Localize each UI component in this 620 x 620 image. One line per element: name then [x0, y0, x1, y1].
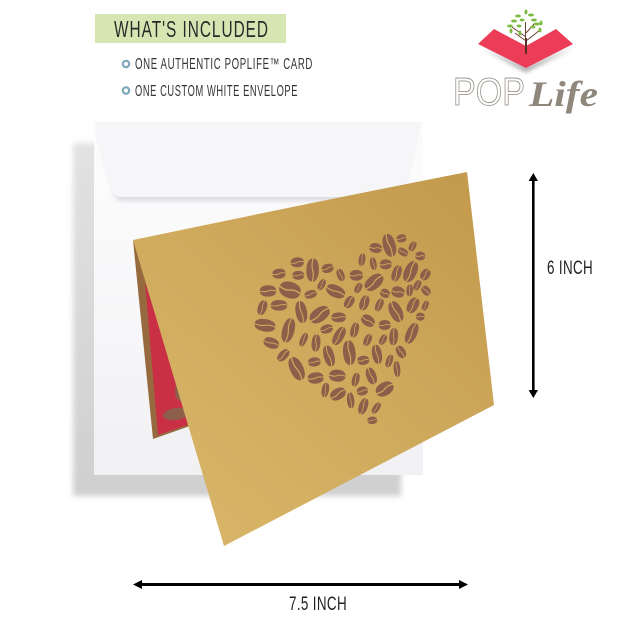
envelope flap [95, 122, 422, 197]
interior bean cutout [162, 381, 190, 422]
logo: poplife [453, 10, 598, 114]
logo wordmark pop: POP [453, 71, 525, 114]
included item: envelope: ONE CUSTOM WHITE ENVELOPE [135, 83, 298, 100]
logo chevron shadow [482, 47, 574, 72]
width label: 7.5 INCH [289, 594, 347, 615]
card red interior [145, 282, 190, 435]
height arrow [529, 173, 538, 398]
envelope flap shadow [112, 190, 412, 201]
included item: card [123, 56, 313, 73]
logo wordmark life: Life [528, 74, 598, 114]
width arrow [133, 580, 468, 589]
included item: card: ONE AUTHENTIC POPLIFE™ CARD [135, 56, 313, 73]
logo red chevron [478, 29, 573, 68]
card back panel [133, 240, 190, 439]
card front gold panel [133, 172, 494, 546]
heading: what's included: WHAT'S INCLUDED [114, 16, 269, 42]
coffee bean heart [253, 232, 433, 424]
envelope shadow [73, 143, 401, 496]
logo tree [507, 10, 542, 54]
height label: 6 INCH [547, 258, 593, 279]
envelope [94, 122, 423, 475]
included item: envelope [123, 83, 298, 100]
heading: what's included [95, 14, 286, 43]
